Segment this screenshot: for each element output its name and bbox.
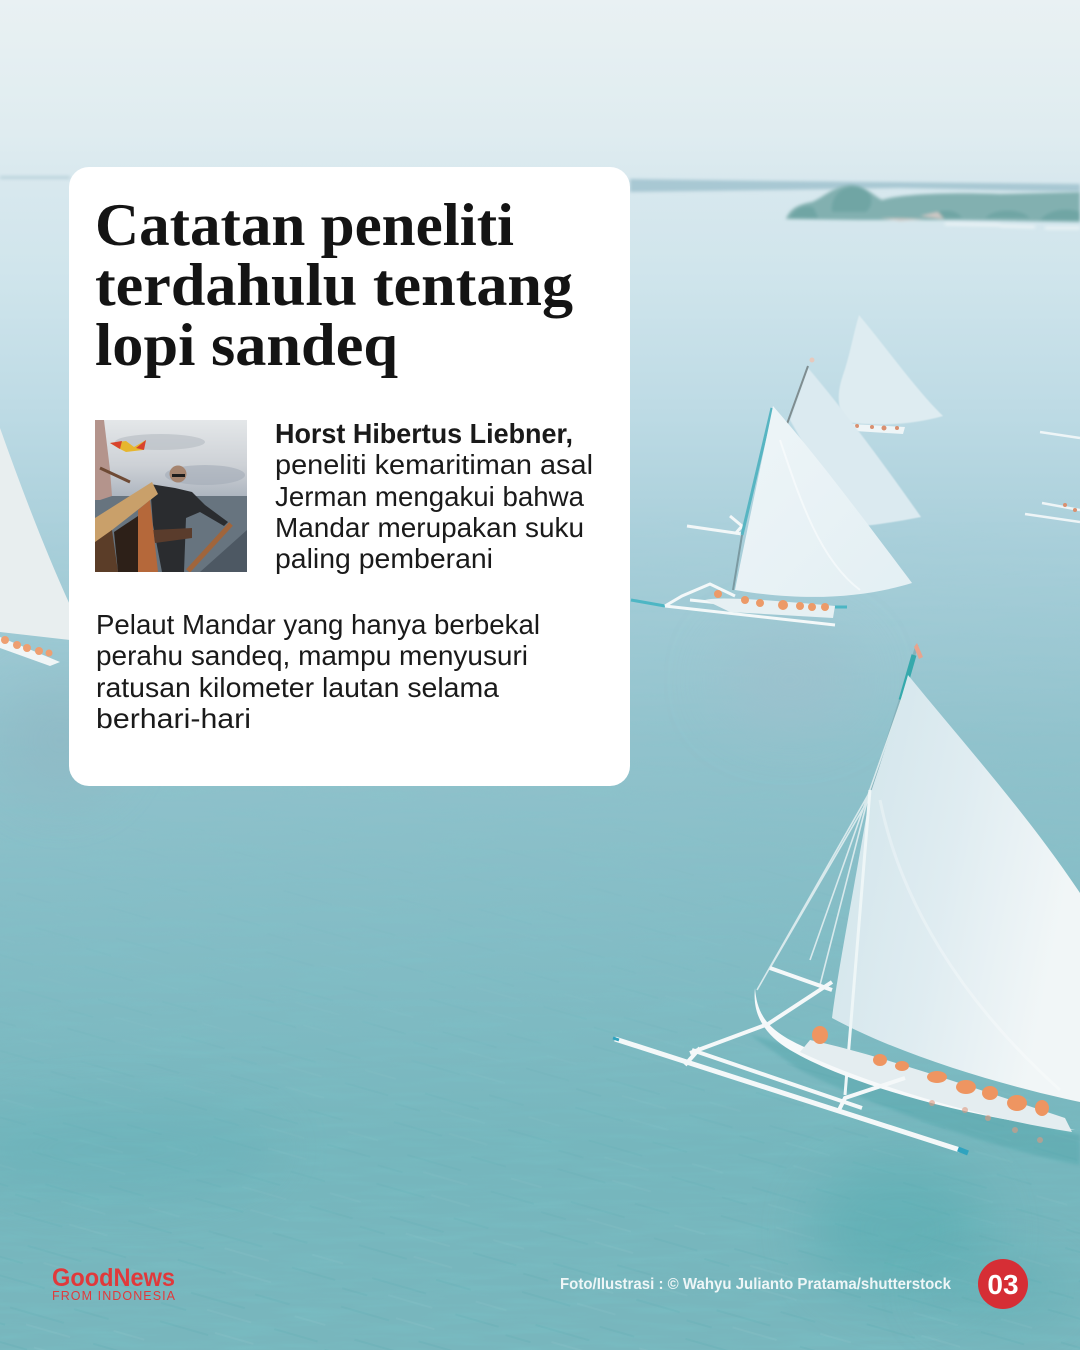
text: researcher note: peneliti kemaritiman asal bbox=[275, 449, 593, 480]
text: researcher note: Mandar merupakan suku bbox=[275, 512, 584, 543]
text: Mandar sailors bbox=[96, 609, 540, 734]
portrait photo: Horst Liebner on a boat bbox=[95, 420, 247, 572]
island bbox=[786, 185, 1080, 228]
page number badge bbox=[978, 1259, 1028, 1309]
crew in orange bbox=[812, 1026, 1049, 1116]
text: Mandar sailors: berhari-hari bbox=[96, 703, 251, 734]
hull shadow bbox=[750, 1035, 1080, 1165]
rigging bbox=[757, 690, 905, 990]
pole bbox=[188, 524, 231, 571]
crossbars and outrigger bbox=[685, 968, 905, 1112]
text: researcher note: Horst Hibertus Liebner, bbox=[275, 418, 573, 449]
man bbox=[150, 484, 228, 572]
text: Mandar sailors: perahu sandeq, mampu menyusuri bbox=[96, 640, 528, 671]
distant shoreline bbox=[0, 176, 1080, 192]
text: researcher note: Jerman mengakui bahwa bbox=[275, 481, 584, 512]
far sailboat bbox=[839, 315, 943, 434]
logo: GoodNews from Indonesia: FROM INDONESIA bbox=[52, 1289, 176, 1303]
heading: Catatan peneliti bbox=[95, 192, 514, 258]
small boats at right edge bbox=[1025, 432, 1080, 522]
flag bbox=[110, 440, 146, 452]
middle sailboat bbox=[631, 406, 912, 625]
crew reflections bbox=[929, 1100, 1043, 1143]
text: Mandar sailors: ratusan kilometer lautan selama bbox=[96, 672, 499, 703]
logo: GoodNews from Indonesia: GoodNews bbox=[52, 1264, 175, 1292]
hull bbox=[755, 988, 1075, 1130]
bamboo boom bbox=[95, 482, 158, 542]
mast bbox=[872, 645, 917, 790]
text: Mandar sailors: Pelaut Mandar yang hanya berbekal bbox=[96, 609, 540, 640]
text: researcher note bbox=[275, 418, 593, 574]
logo: GoodNews from Indonesia bbox=[52, 1264, 176, 1303]
sail bbox=[832, 675, 1080, 1102]
heading bbox=[95, 192, 573, 378]
text: researcher note: paling pemberani bbox=[275, 543, 493, 574]
left sailboat bbox=[0, 428, 70, 666]
second sailboat bbox=[687, 358, 921, 534]
heading: lopi sandeq bbox=[95, 312, 398, 378]
page number badge: 03 bbox=[987, 1269, 1019, 1300]
photo credit: Foto/Ilustrasi : © Wahyu Julianto Pratama/shutterstock bbox=[560, 1276, 951, 1293]
foreground sailboat bbox=[613, 643, 1080, 1165]
heading: terdahulu tentang bbox=[95, 252, 573, 318]
panel: text card bbox=[69, 167, 630, 786]
